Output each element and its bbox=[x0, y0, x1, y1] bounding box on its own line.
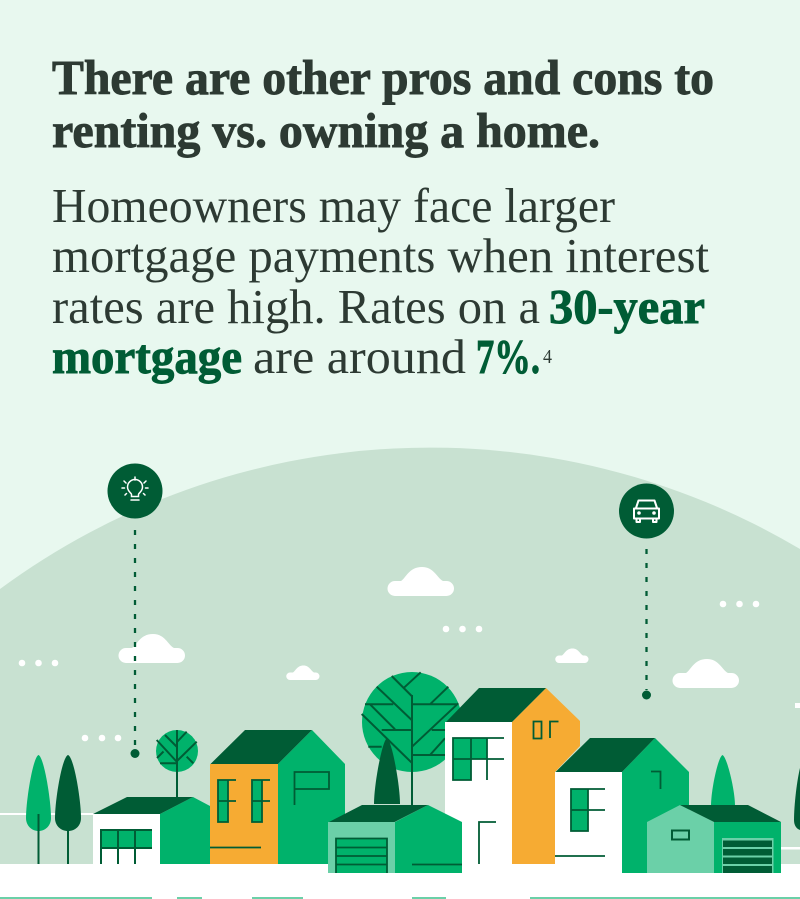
body text: are around bbox=[253, 329, 466, 384]
house 2: orange house bbox=[210, 730, 345, 864]
tree: dark left bbox=[55, 755, 81, 864]
road markings bbox=[0, 897, 800, 899]
icon: car pin bbox=[619, 484, 674, 700]
tree: dark right edge bbox=[794, 768, 800, 830]
body text: 30-year bbox=[549, 279, 705, 334]
cloud: top center bbox=[388, 567, 454, 596]
tree: dark behind garage bbox=[374, 738, 400, 804]
title: There are other pros and cons to bbox=[52, 50, 714, 105]
body text: rates are high. Rates on a bbox=[52, 279, 540, 334]
tree: small round bbox=[156, 730, 198, 798]
house 3: tall white and orange house bbox=[445, 688, 580, 873]
horizon lines bbox=[0, 813, 800, 850]
garage house: left bbox=[328, 805, 462, 873]
tree: big round bbox=[362, 672, 462, 806]
house 1: white low house bbox=[93, 797, 210, 864]
tree: light right bbox=[711, 755, 735, 806]
body text: 4 bbox=[543, 346, 552, 368]
body text bbox=[52, 178, 709, 384]
body text: 7%. bbox=[476, 329, 540, 384]
dots decoration bbox=[19, 601, 800, 741]
cloud: small left bbox=[286, 666, 320, 680]
icon: lightbulb pin bbox=[108, 464, 162, 758]
garage house: right bbox=[647, 805, 781, 873]
title bbox=[52, 50, 714, 158]
hill background bbox=[0, 448, 800, 899]
body text: mortgage payments when interest bbox=[52, 228, 709, 283]
house 4: white and green house bbox=[555, 738, 689, 873]
body text: Homeowners may face larger bbox=[52, 178, 615, 233]
title: renting vs. owning a home. bbox=[52, 103, 600, 158]
tree: light left bbox=[26, 755, 51, 864]
cloud: left bbox=[118, 634, 185, 663]
ground bbox=[0, 864, 800, 899]
cloud: right bbox=[672, 659, 739, 688]
body text: mortgage bbox=[52, 329, 242, 384]
cloud: small right bbox=[555, 648, 588, 663]
